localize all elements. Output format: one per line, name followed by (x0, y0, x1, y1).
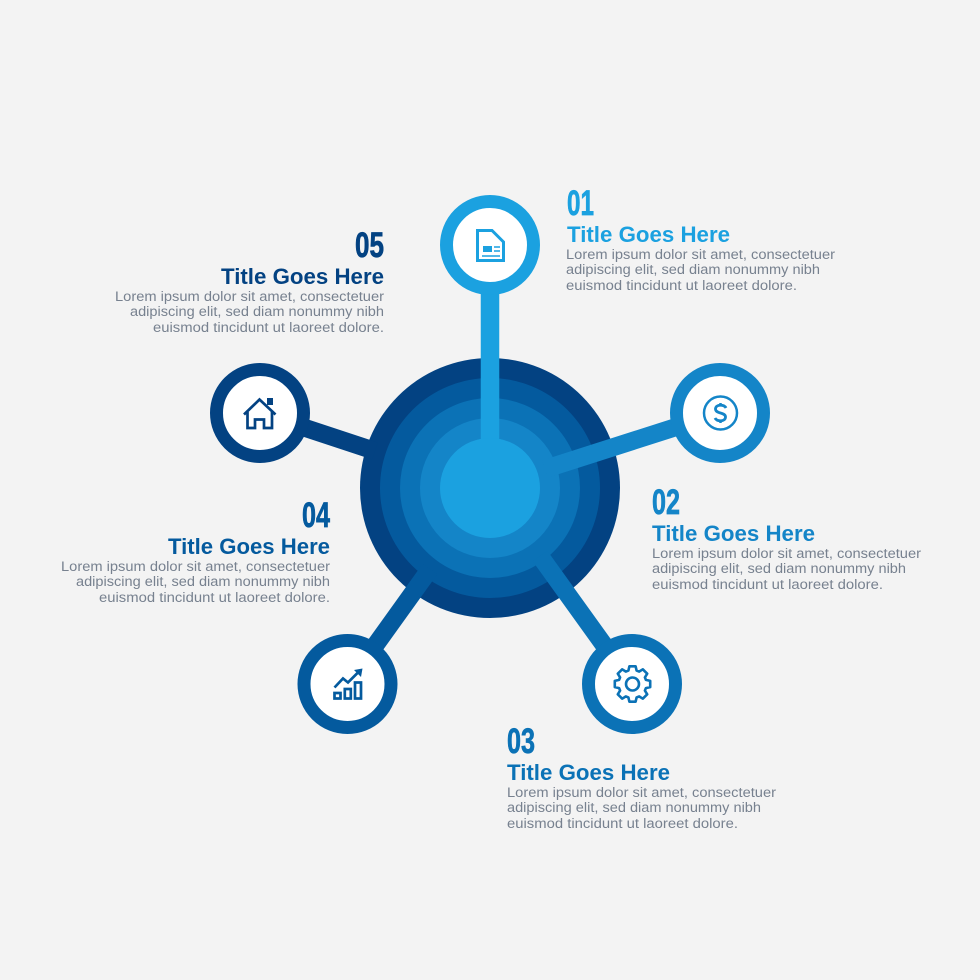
text block 02: Lorem ipsum dolor sit amet, consectetuer (652, 546, 922, 561)
text block 05: 05 (355, 226, 384, 265)
node 4 with growth chart icon (304, 640, 391, 728)
text block 03: 03 (507, 722, 535, 761)
text block 04: 04 (302, 496, 330, 535)
text block 04: adipiscing elit, sed diam nonummy nibh (76, 574, 330, 589)
connector: node 2 (545, 413, 720, 469)
icon: dollar coin (704, 396, 737, 430)
text block 02: adipiscing elit, sed diam nonummy nibh (652, 561, 906, 576)
hub core (440, 438, 540, 538)
connector: node 4 (348, 569, 430, 684)
icon: gear (615, 666, 650, 702)
node 3 with gear icon (588, 640, 676, 728)
icon: house (244, 398, 276, 428)
text block 02: 02 (652, 483, 680, 522)
text block 02: euismod tincidunt ut laoreet dolore. (652, 577, 883, 592)
node 5 with house icon (216, 370, 304, 456)
text block 02: Title Goes Here (652, 521, 815, 546)
text block 03: adipiscing elit, sed diam nonummy nibh (507, 800, 761, 815)
text block 01: Lorem ipsum dolor sit amet, consectetuer (566, 247, 836, 262)
connector: node 3 (540, 556, 632, 684)
text block 04: Title Goes Here (168, 534, 330, 559)
text block 03 (507, 722, 777, 831)
node 2 with dollar icon (676, 370, 764, 456)
central concentric hub (360, 358, 620, 618)
text block 03: euismod tincidunt ut laoreet dolore. (507, 816, 738, 831)
text block 05: Title Goes Here (221, 264, 384, 289)
text block 04: Lorem ipsum dolor sit amet, consectetuer (61, 559, 331, 574)
text block 05 (115, 226, 385, 335)
text block 01 (566, 184, 836, 293)
text block 05: euismod tincidunt ut laoreet dolore. (153, 320, 384, 335)
icon: document (478, 230, 504, 260)
text block 01: adipiscing elit, sed diam nonummy nibh (566, 262, 820, 277)
text block 02 (652, 483, 922, 592)
text block 04 (61, 496, 331, 605)
text block 05: adipiscing elit, sed diam nonummy nibh (130, 304, 384, 319)
text block 01: Title Goes Here (567, 222, 730, 247)
text block 03: Title Goes Here (507, 760, 670, 785)
text block 03: Lorem ipsum dolor sit amet, consectetuer (507, 785, 777, 800)
connector: node 1 (481, 245, 499, 450)
text block 01: euismod tincidunt ut laoreet dolore. (566, 278, 797, 293)
icon: growth chart (334, 668, 362, 698)
node 1 with document icon (446, 202, 534, 288)
text block 01: 01 (567, 184, 594, 223)
text block 05: Lorem ipsum dolor sit amet, consectetuer (115, 289, 385, 304)
connector: node 5 (260, 413, 375, 451)
text block 04: euismod tincidunt ut laoreet dolore. (99, 590, 330, 605)
